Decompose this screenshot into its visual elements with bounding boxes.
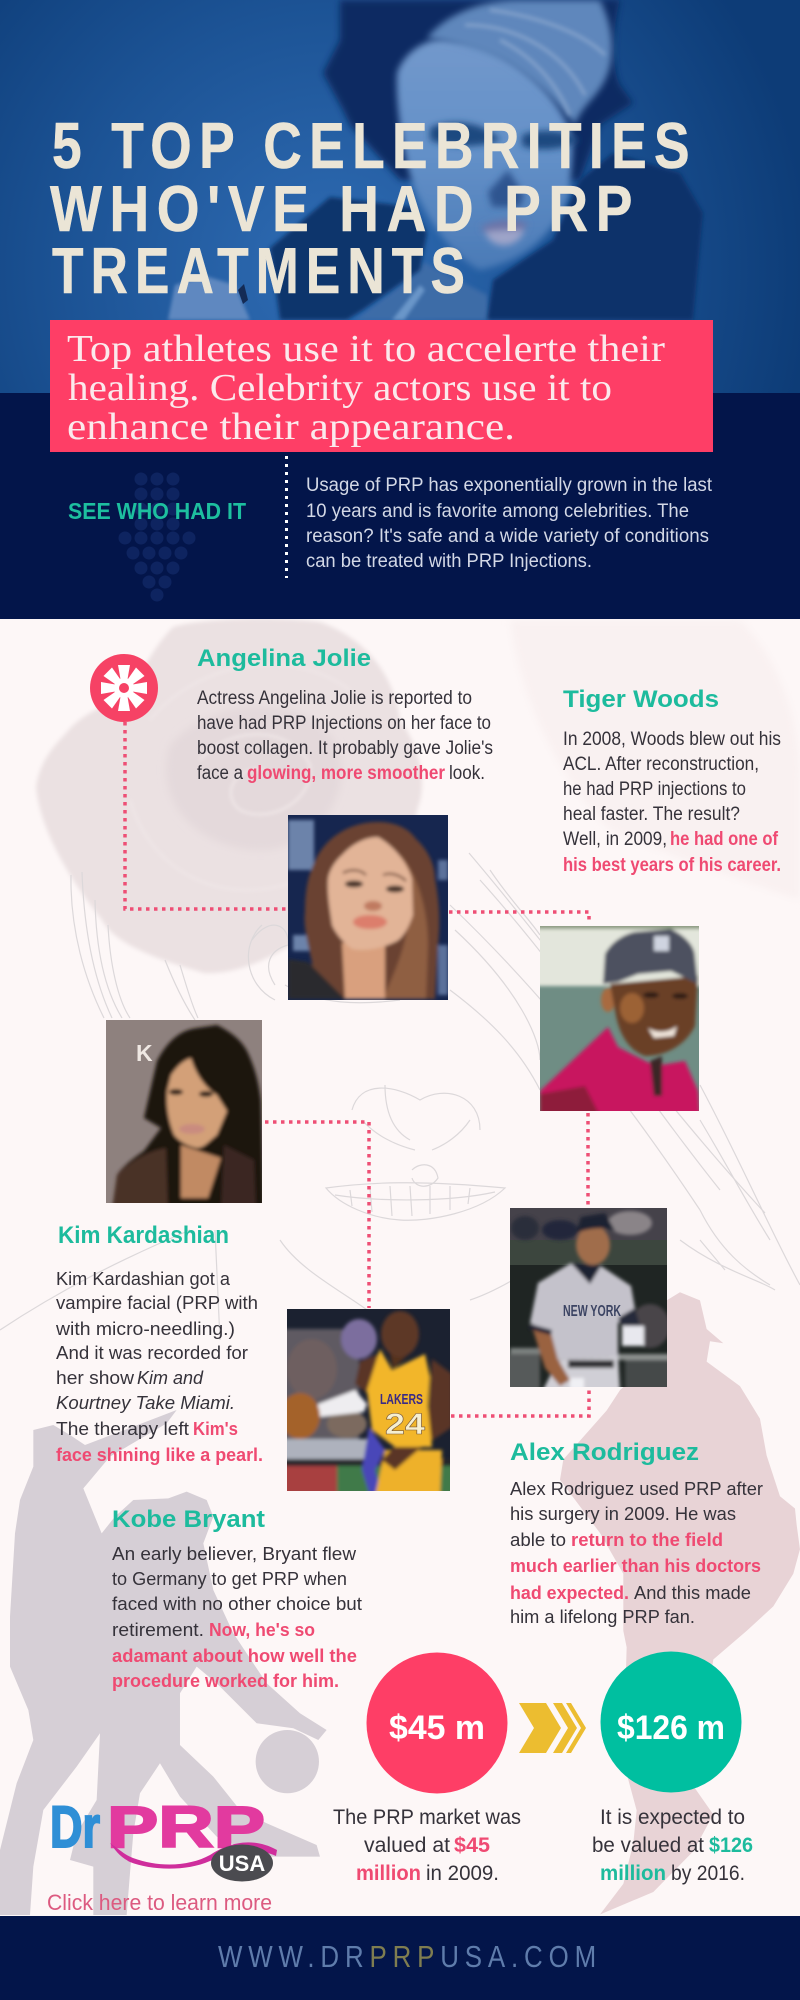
text block: Kim Kardashian: Kim Kardashian bbox=[58, 1222, 229, 1249]
text block: Alex Rodriguez: And this made bbox=[634, 1583, 751, 1603]
text block: Tiger Woods: Tiger Woods bbox=[563, 686, 719, 713]
text block: Angelina Jolie: face a bbox=[197, 763, 243, 784]
background art: rose and line-drawn face bbox=[0, 619, 800, 1340]
text block: Angelina Jolie: Actress Angelina Jolie is reported to bbox=[197, 688, 472, 709]
photo: Kim Kardashian: K bbox=[136, 1040, 153, 1066]
panel: header background bbox=[0, 0, 800, 619]
photo: Angelina Jolie bbox=[288, 815, 448, 1000]
callout: pink banner: enhance their appearance. bbox=[67, 406, 515, 448]
fur collar right bbox=[487, 153, 703, 320]
footer band bbox=[0, 1916, 800, 2000]
hand bbox=[168, 276, 250, 320]
text block: Kobe Bryant: procedure worked for him. bbox=[112, 1671, 339, 1691]
text block: Alex Rodriguez: able to bbox=[510, 1530, 566, 1550]
text block: Alex Rodriguez: him a lifelong PRP fan. bbox=[510, 1607, 695, 1627]
icon: dotted down arrow bbox=[118, 472, 196, 602]
photo: Kobe Bryant: LAKERS bbox=[380, 1391, 423, 1408]
text block: Kim Kardashian: Kourtney Take Miami. bbox=[56, 1393, 235, 1413]
text block: Alex Rodriguez: Alex Rodriguez bbox=[510, 1439, 699, 1466]
text block: Kim Kardashian: vampire facial (PRP with bbox=[56, 1293, 258, 1313]
text block: Alex Rodriguez: return to the field bbox=[571, 1530, 723, 1550]
intro paragraph: Usage of PRP has exponentially grown in the last bbox=[306, 475, 713, 496]
logo: Dr PRP USA: PRP bbox=[107, 1795, 265, 1860]
text block: Tiger Woods bbox=[563, 686, 781, 876]
silhouette: baseball player bbox=[560, 1292, 800, 1914]
text block: Kobe Bryant: faced with no other choice but bbox=[112, 1594, 362, 1614]
logo: Dr PRP USA bbox=[50, 1795, 277, 1882]
text block: Alex Rodriguez: his surgery in 2009. He was bbox=[510, 1504, 736, 1524]
intro paragraph: reason? It's safe and a wide variety of conditions bbox=[306, 526, 709, 547]
stat: $126 m circle bbox=[600, 1652, 742, 1792]
facial features bbox=[430, 123, 580, 245]
title bbox=[50, 109, 697, 307]
callout: pink banner bbox=[50, 320, 713, 452]
photo: Kobe Bryant bbox=[287, 1309, 450, 1491]
intro paragraph: can be treated with PRP Injections. bbox=[306, 551, 592, 572]
background photo: woman in fur bbox=[168, 0, 703, 320]
text block: Kim Kardashian: with micro-needling.) bbox=[55, 1319, 235, 1339]
stat: $45 m circle bbox=[366, 1652, 508, 1794]
neck and chest bbox=[355, 262, 490, 320]
text block: Alex Rodriguez bbox=[510, 1439, 763, 1627]
text block: Kobe Bryant: to Germany to get PRP when bbox=[112, 1569, 347, 1589]
logo: Dr PRP USA: USA bbox=[219, 1851, 265, 1876]
title: TREATMENTS bbox=[52, 234, 472, 307]
text block: Kobe Bryant bbox=[112, 1506, 362, 1691]
silhouette: basketball player bbox=[0, 1410, 327, 1915]
text block: Alex Rodriguez: had expected. bbox=[510, 1583, 629, 1603]
dotted connector lines bbox=[125, 722, 589, 1416]
footer band: WWW.DRPRPUSA.COM bbox=[218, 1939, 602, 1974]
text block: Kim Kardashian: The therapy left bbox=[56, 1419, 189, 1439]
caption: 2009 market value: The PRP market was bbox=[333, 1806, 521, 1829]
caption: 2016 market value: $126 bbox=[709, 1834, 753, 1857]
caption: 2009 market value: valued at bbox=[364, 1834, 450, 1857]
text block: Kobe Bryant: Now, he's so bbox=[209, 1620, 315, 1640]
text block: Kim Kardashian: Kim's bbox=[193, 1419, 238, 1439]
text block: Angelina Jolie: glowing, more smoother bbox=[247, 763, 446, 784]
text block: Angelina Jolie: look. bbox=[449, 763, 485, 784]
caption: 2016 market value: be valued at bbox=[592, 1834, 704, 1857]
text block: Kim Kardashian: her show bbox=[56, 1368, 135, 1388]
caption: 2009 market value: million bbox=[356, 1862, 421, 1885]
photo: Kobe Bryant: 24 bbox=[385, 1408, 425, 1441]
stat: $126 m circle: $126 m bbox=[617, 1709, 725, 1747]
text block: Kim Kardashian bbox=[55, 1222, 263, 1465]
text block: Tiger Woods: heal faster. The result? bbox=[563, 804, 740, 825]
text block: Tiger Woods: Well, in 2009, bbox=[563, 829, 667, 850]
caption: 2016 market value bbox=[592, 1806, 753, 1885]
text block: Kim Kardashian: face shining like a pearl. bbox=[56, 1445, 263, 1465]
vertical dotted divider bbox=[285, 456, 288, 578]
link: click here: Click here to learn more bbox=[47, 1890, 272, 1915]
callout: pink banner: Top athletes use it to accelerte their bbox=[67, 328, 665, 370]
photo: Tiger Woods bbox=[540, 926, 699, 1111]
subheading: see who had it: SEE WHO HAD IT bbox=[68, 498, 246, 524]
fur hat bbox=[323, 0, 633, 180]
face bbox=[397, 39, 573, 270]
stat: $45 m circle: $45 m bbox=[389, 1709, 485, 1747]
page background bbox=[0, 619, 800, 1919]
blonde hair bbox=[427, 0, 612, 125]
text block: Kim Kardashian: Kim and bbox=[137, 1368, 204, 1388]
caption: 2016 market value: million bbox=[600, 1862, 666, 1885]
fur collar left bbox=[270, 197, 427, 320]
text block: Alex Rodriguez: much earlier than his doctors bbox=[510, 1556, 761, 1576]
photo: Alex Rodriguez bbox=[510, 1208, 667, 1387]
caption: 2016 market value: by 2016. bbox=[671, 1862, 745, 1885]
text block: Kobe Bryant: An early believer, Bryant flew bbox=[112, 1544, 357, 1564]
text block: Angelina Jolie bbox=[197, 645, 493, 784]
text block: Kobe Bryant: adamant about how well the bbox=[112, 1646, 357, 1666]
text block: Angelina Jolie: boost collagen. It probably gave Jolie's bbox=[197, 738, 493, 759]
callout: pink banner: healing. Celebrity actors use it to bbox=[68, 367, 612, 409]
text block: Kobe Bryant: Kobe Bryant bbox=[112, 1506, 265, 1533]
caption: 2009 market value: in 2009. bbox=[426, 1862, 499, 1885]
text block: Tiger Woods: he had PRP injections to bbox=[563, 779, 746, 800]
text block: Kobe Bryant: retirement. bbox=[112, 1620, 204, 1640]
text block: Kim Kardashian: Kim Kardashian got a bbox=[56, 1269, 231, 1289]
icon: pink flower badge bbox=[90, 654, 158, 722]
text block: Angelina Jolie: Angelina Jolie bbox=[197, 645, 371, 672]
photo: Kim Kardashian bbox=[106, 1020, 262, 1203]
title: WHO'VE HAD PRP bbox=[50, 172, 640, 245]
caption: 2009 market value: $45 bbox=[454, 1834, 490, 1857]
caption: 2009 market value bbox=[333, 1806, 521, 1885]
text block: Alex Rodriguez: Alex Rodriguez used PRP after bbox=[510, 1479, 763, 1499]
text block: Kim Kardashian: And it was recorded for bbox=[56, 1343, 248, 1363]
intro paragraph bbox=[306, 475, 713, 572]
logo: Dr PRP USA: Dr bbox=[50, 1795, 100, 1860]
caption: 2016 market value: It is expected to bbox=[600, 1806, 745, 1829]
text block: Tiger Woods: ACL. After reconstruction, bbox=[563, 754, 759, 775]
intro paragraph: 10 years and is favorite among celebrities. The bbox=[306, 501, 689, 522]
text block: Angelina Jolie: have had PRP Injections on her face to bbox=[197, 713, 491, 734]
arrow: yellow chevrons bbox=[519, 1703, 586, 1753]
text block: Tiger Woods: he had one of bbox=[670, 829, 779, 850]
text block: Tiger Woods: In 2008, Woods blew out his bbox=[563, 729, 781, 750]
photo: Alex Rodriguez: NEW YORK bbox=[563, 1303, 621, 1320]
